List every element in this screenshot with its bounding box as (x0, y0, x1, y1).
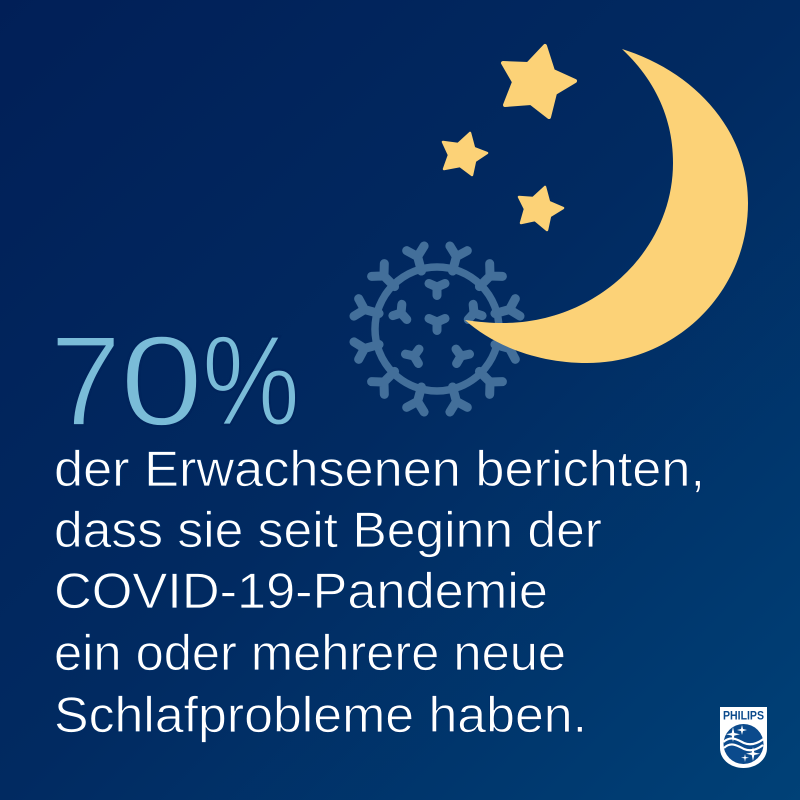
text block: description: COVID-19-Pandemie (54, 563, 548, 619)
icon: large star (503, 46, 575, 117)
text block: description: der Erwachsenen berichten, (54, 441, 705, 497)
statistic: 70% (50, 309, 300, 453)
icon: small star right (519, 187, 563, 230)
logo: Philips shield (720, 707, 767, 768)
icon: virus (354, 246, 520, 412)
text block: description: ein oder mehrere neue (54, 625, 566, 681)
text block: description: Schlafprobleme haben. (54, 687, 587, 743)
logo: Philips shield: PHILIPS (723, 708, 764, 722)
text block: description: dass sie seit Beginn der (54, 502, 602, 558)
statistic: 70%: % (202, 310, 300, 453)
text block: description (54, 441, 705, 743)
icon: crescent moon (465, 49, 748, 363)
icon: small star left (443, 133, 487, 175)
statistic: 70%: 7 (50, 310, 121, 453)
statistic: 70%: 0 (120, 309, 203, 453)
